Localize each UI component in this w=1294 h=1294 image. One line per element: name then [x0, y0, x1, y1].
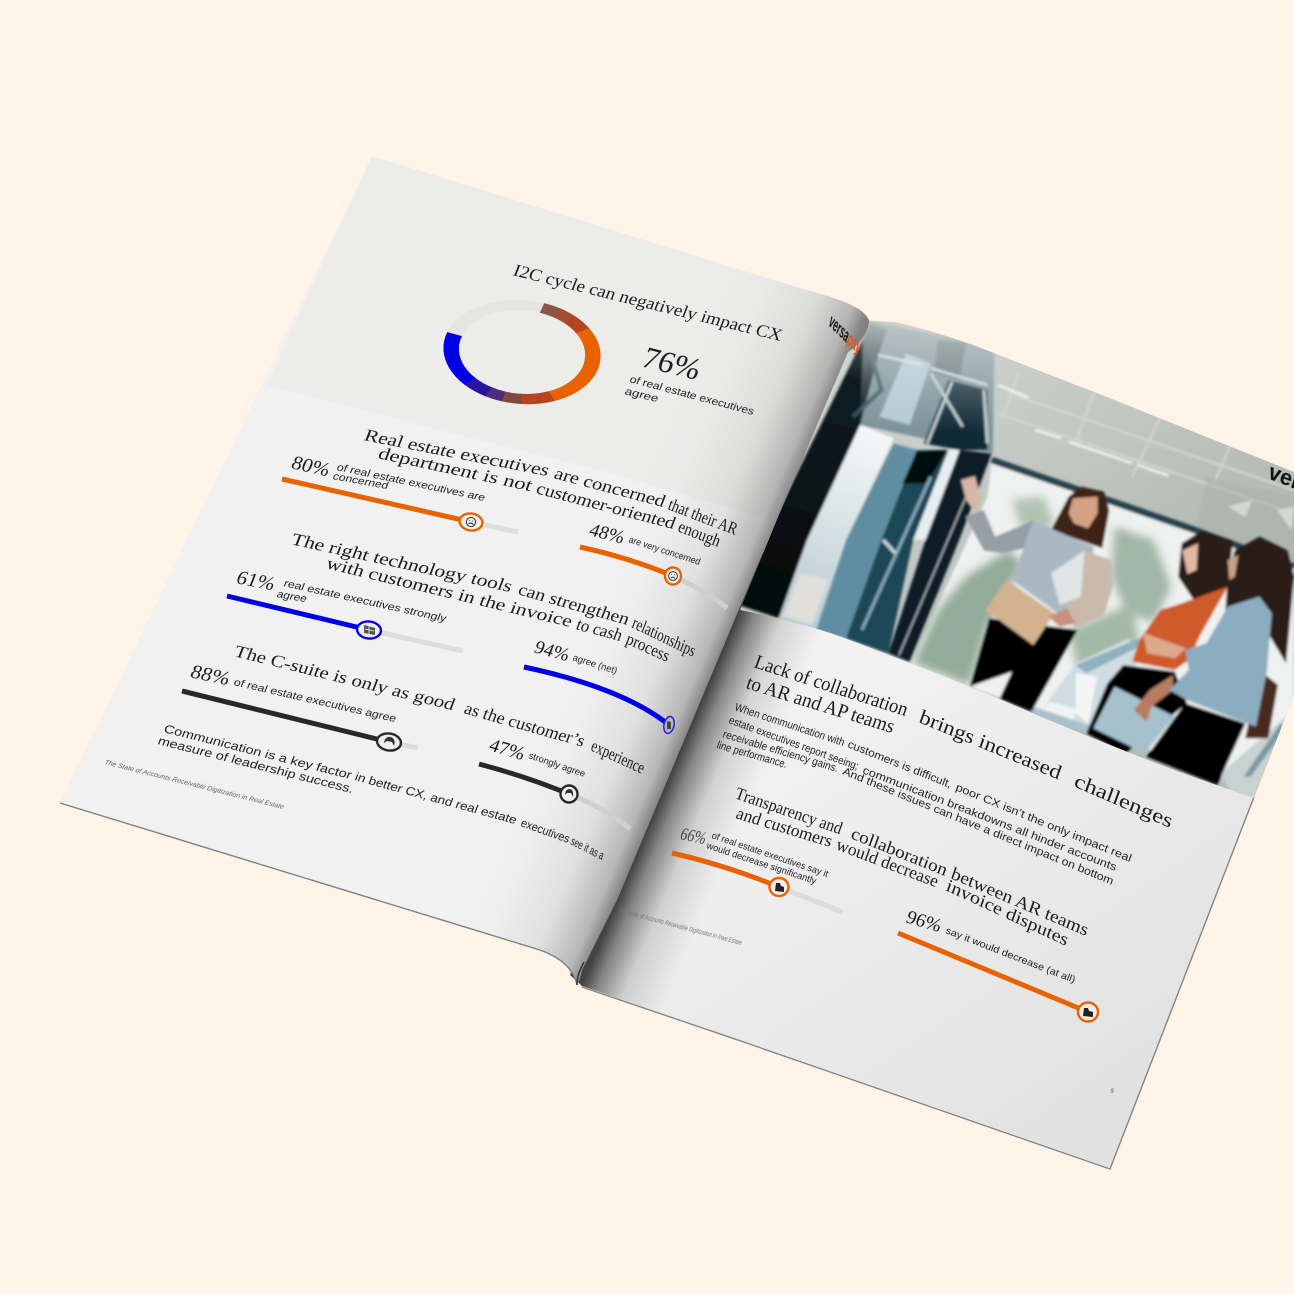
heading: AR department concern: Real estate executives: [362, 425, 553, 480]
stat: 88% agree: 88%: [187, 661, 233, 690]
heading: AR department concern: department is not: [376, 443, 536, 495]
heading: lack of collaboration: challenges: [1071, 770, 1176, 833]
heading: transparency and collaboration: and customers: [734, 803, 836, 851]
photo: three women looking at a window in a glass building: [730, 310, 1294, 810]
heading: C-suite: as the customer’s: [462, 698, 588, 751]
heading: right technology tools: with customers in the invoice: [324, 553, 576, 631]
slider: 94% with tech icon: [524, 667, 676, 734]
stat: 96% decrease at all: 96%: [903, 907, 945, 937]
stat: 88% agree: [187, 661, 398, 725]
heading: transparency and collaboration: Transparency and: [733, 783, 846, 838]
heading: transparency and collaboration: [733, 783, 1092, 950]
slider: 96% with building icon: [898, 933, 1098, 1022]
slider: 80% with sad face: [282, 479, 518, 532]
heading: I2C cycle: I2C cycle can negatively impact CX: [511, 260, 786, 345]
stat: 48% very concerned: are very concerned: [627, 535, 702, 568]
stat: 94% agree (net): agree (net): [571, 653, 619, 677]
text block: body copy: When communication with: [733, 702, 846, 749]
slider: 47% with person icon: [479, 764, 630, 829]
white strip: [913, 450, 960, 540]
heading: lack of collaboration: [743, 651, 1176, 833]
stat: 61% strongly agree: [233, 567, 449, 625]
panel: right page: [570, 322, 1294, 1169]
text block: communication note: Communication is a key factor: [162, 722, 354, 782]
text block: communication note: in better CX, and real estate: [353, 770, 519, 827]
stat: 94% agree (net): 94%: [531, 637, 573, 666]
stat: 88% agree: of real estate executives agree: [232, 678, 398, 725]
stat: 61% strongly agree: 61%: [233, 567, 278, 595]
woman three bag: [1245, 670, 1278, 738]
window top frame: [992, 460, 1294, 567]
panel: left page: [60, 156, 869, 985]
heading: lack of collaboration: Lack of collaboration: [751, 651, 911, 721]
stat: 96% decrease at all: [903, 907, 1077, 986]
text block: communication note: measure of leadership success.: [156, 734, 356, 796]
heading: transparency and collaboration: between AR teams: [949, 863, 1092, 940]
heading: right technology tools: relationships: [630, 612, 699, 661]
stat: 48% very concerned: 48%: [586, 520, 628, 548]
text block: body copy: communication breakdowns all hinder accounts: [861, 765, 1119, 874]
heading: right technology tools: to cash: [574, 614, 626, 645]
truss: [878, 355, 987, 385]
heading: right technology tools: can strengthen: [516, 579, 633, 629]
slider: 66% with building icon: [672, 853, 843, 912]
text block: communication note: executives: [519, 816, 572, 846]
text block: body copy: estate executives report seeing;: [727, 715, 860, 773]
heading: C-suite: The C-suite is only as good: [232, 641, 459, 714]
stat: 66% decrease significantly: of real estate executives say it: [710, 830, 830, 880]
heading: AR department concern: enough: [676, 516, 724, 551]
logo: versapay on left page: versapay: [827, 310, 864, 358]
woman two: [1086, 665, 1187, 753]
footer: left page: The State of Accounts Receivable Digitization in Real Estate: [103, 759, 285, 811]
slider: 48% with sad face: [580, 547, 727, 608]
text block: body copy: poor CX isn’t the only impact real: [954, 782, 1133, 865]
stat: 66% decrease significantly: 66%: [678, 824, 709, 848]
stat: 76%: 76%: [637, 340, 706, 386]
heading: transparency and collaboration: would decrease: [834, 834, 942, 891]
house: [1045, 638, 1137, 726]
stat: 80% concerned: concerned: [331, 472, 390, 492]
heading: transparency and collaboration: invoice disputes: [944, 875, 1072, 950]
stat: 94% agree (net): [531, 637, 619, 677]
text block: body copy: receivable efficiency gains.: [721, 729, 840, 775]
stat: 47% strongly agree: [486, 735, 587, 780]
stat: 80% concerned: 80%: [288, 452, 333, 481]
page number: 5: [1109, 1088, 1115, 1095]
black strip at window: [888, 450, 992, 662]
heading: right technology tools: The right technology tools: [289, 529, 516, 596]
caption: 76% of real estate executives agree: of real estate executives: [628, 375, 756, 418]
window sky: [910, 462, 1294, 800]
ceiling grid: [1002, 393, 1294, 508]
stat: 47% strongly agree: strongly agree: [527, 751, 587, 780]
woman one: [970, 618, 1077, 712]
slider: 61% with tech icon: [227, 596, 463, 651]
bright side window: [779, 425, 894, 630]
foliage: [913, 497, 1171, 685]
heading: C-suite: [232, 641, 648, 778]
stat: 80% concerned: of real estate executives are: [335, 463, 487, 504]
heading: AR department concern: that their AR: [666, 494, 741, 539]
heading: C-suite: experience: [589, 735, 648, 778]
stat: 96% decrease at all: say it would decrease (at all): [944, 925, 1077, 986]
stat: 48% very concerned: [586, 520, 702, 568]
dark teal column: [846, 450, 949, 653]
heading: AR department concern: customer-oriented: [534, 478, 679, 533]
heading: AR department concern: [362, 425, 741, 551]
caption: 76% of real estate executives agree: agree: [623, 387, 660, 405]
black column: [733, 323, 887, 618]
text block: body copy: line performance.: [715, 740, 789, 771]
stat: 66% decrease significantly: [678, 824, 830, 887]
heading: right technology tools: process: [624, 628, 673, 666]
stat: 66% decrease significantly: would decrease significantly: [704, 840, 818, 887]
text block: body copy: And these issues can have a direct impact on bottom: [841, 766, 1115, 888]
railing and lower right: [1219, 716, 1286, 798]
heading: transparency and collaboration: collaboration: [849, 823, 951, 880]
text block: communication note: [156, 722, 606, 863]
text block: communication note: see it as a: [569, 834, 606, 863]
stat: 61% strongly agree: agree: [275, 590, 309, 605]
heading: lack of collaboration: to AR and AP teams: [743, 672, 898, 738]
stat: 80% concerned: [288, 452, 487, 504]
donut chart: 76%: [447, 299, 597, 405]
stat: 61% strongly agree: real estate executives strongly: [282, 579, 449, 625]
upper column zone: [860, 320, 994, 453]
stat: 47% strongly agree: 47%: [486, 735, 528, 765]
text block: body copy: [715, 702, 1133, 888]
woman three: [1146, 703, 1245, 785]
heading: right technology tools: [289, 529, 699, 666]
slider: 88% with person icon: [182, 691, 418, 752]
heading: AR department concern: are concerned: [552, 463, 669, 511]
heading: lack of collaboration: brings increased: [916, 706, 1064, 784]
text block: body copy: customers is difficult,: [846, 739, 953, 791]
blue column: [816, 443, 917, 638]
footer: right page: The State of Accounts Receivable Digitization in Real Estate: [617, 907, 743, 947]
